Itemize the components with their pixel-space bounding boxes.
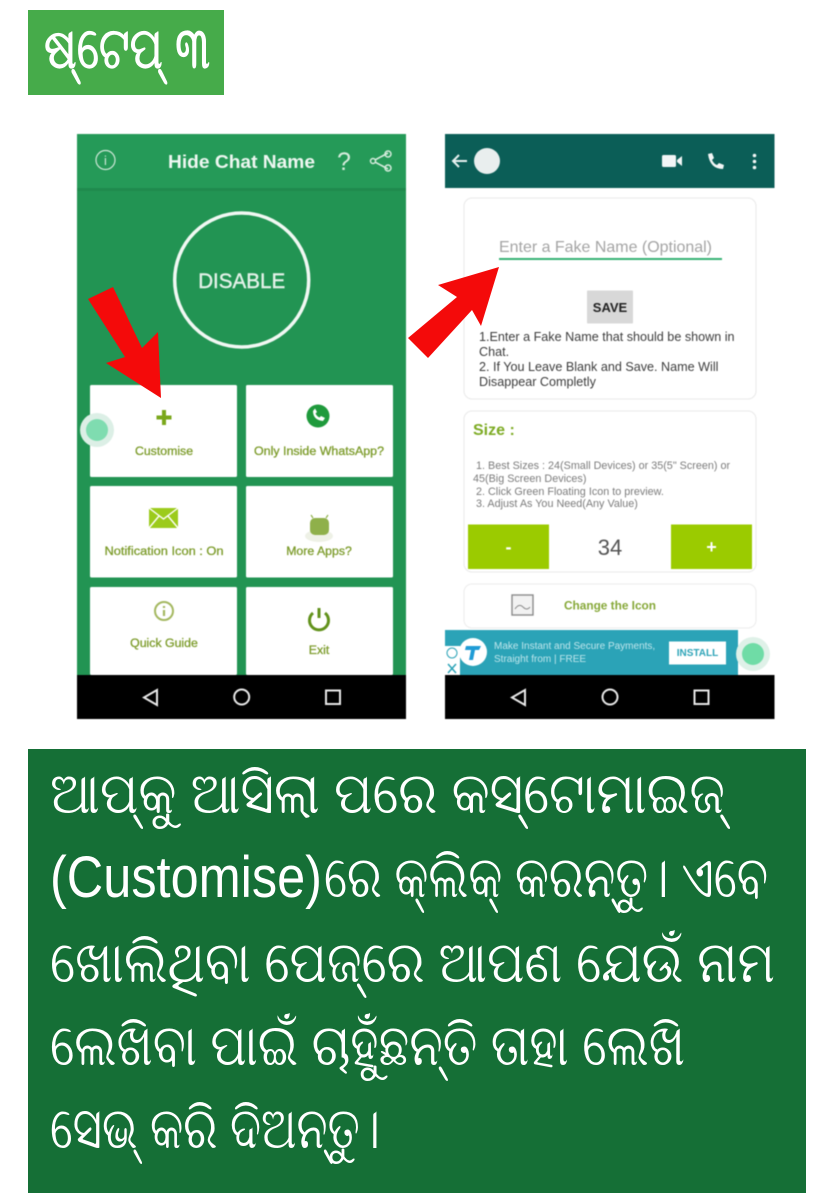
card: fake name form: 1.Enter a Fake Name that should be shown in: [479, 330, 735, 344]
card: fake name form: Enter a Fake Name (Optional): [499, 239, 712, 256]
floating green bubble: [80, 413, 114, 447]
tile: only inside whatsapp: [246, 385, 393, 477]
app header bar: ?: [337, 148, 351, 176]
card: size controls: 45(Big Screen Devices): [473, 473, 586, 485]
advert banner: INSTALL: [677, 648, 718, 659]
tile: exit: [246, 587, 393, 675]
card: fake name form: SAVE: [593, 300, 628, 315]
panel: instruction text: ସେଭ୍ କରି ଦିଅନ୍ତୁ।: [50, 1096, 380, 1164]
card: fake name form: [464, 198, 756, 399]
panel: left phone screenshot: [77, 134, 406, 719]
app header bar: i: [104, 153, 107, 168]
advert banner: [445, 630, 738, 675]
chat header bar: [445, 134, 774, 188]
panel: right phone screenshot: [445, 134, 774, 719]
panel: instruction text: ଲେଖିବା ପାଇଁ ଚାହୁଁଛନ୍ତି ତାହା ଲେଖି: [50, 1013, 685, 1081]
tile: only inside whatsapp: Only Inside WhatsApp?: [254, 444, 384, 458]
floating green bubble: [736, 637, 770, 671]
card: fake name form: Chat.: [479, 345, 509, 359]
disable button: DISABLE: [198, 270, 285, 293]
card: size controls: Size :: [473, 422, 515, 439]
card: size controls: -: [506, 537, 512, 557]
step heading badge: [28, 10, 224, 95]
panel: instruction text: [28, 749, 806, 1193]
tile: customise: [90, 385, 237, 477]
tile: more apps: More Apps?: [286, 544, 352, 558]
tile: notification icon: [90, 486, 237, 578]
advert banner: Make Instant and Secure Payments,: [494, 641, 655, 652]
card: size controls: [464, 411, 756, 572]
card: fake name form: 2. If You Leave Blank and Save. Name Will: [479, 360, 718, 374]
advert banner: Straight from | FREE: [494, 654, 586, 665]
card: change the icon: [464, 584, 756, 628]
tile: quick guide: Quick Guide: [130, 636, 198, 650]
panel: instruction text: (Customise): [50, 845, 322, 910]
tile: customise: Customise: [135, 444, 193, 458]
android navigation bar: [445, 675, 774, 719]
card: size controls: 1. Best Sizes : 24(Small Devices) or 35(5" Screen) or: [476, 460, 730, 472]
arrow: red arrow pointing to name field: [408, 267, 499, 358]
card: fake name form: Disappear Completly: [479, 375, 597, 389]
step heading badge: ଷ୍ଟେପ୍ ୩: [44, 16, 210, 84]
android navigation bar: [77, 675, 406, 719]
tile: quick guide: [90, 587, 237, 675]
tile: exit: Exit: [309, 643, 330, 657]
arrow: red arrow pointing to customise: [88, 287, 161, 398]
card: size controls: 2. Click Green Floating Icon to preview.: [476, 486, 664, 498]
tile: more apps: [246, 486, 393, 578]
app header bar: [77, 134, 406, 191]
card: change the icon: Change the Icon: [564, 598, 656, 612]
card: size controls: +: [706, 537, 717, 557]
disable button: [175, 213, 309, 347]
card: size controls: 34: [598, 535, 622, 560]
app header bar: Hide Chat Name: [168, 152, 315, 172]
panel: instruction text: ଆପ୍‌କୁ ଆସିଲା ପରେ କସ୍‌ଟୋମାଇଜ୍: [50, 761, 731, 829]
card: size controls: 3. Adjust As You Need(Any Value): [476, 498, 638, 510]
tile: notification icon: Notification Icon : On: [104, 544, 224, 558]
